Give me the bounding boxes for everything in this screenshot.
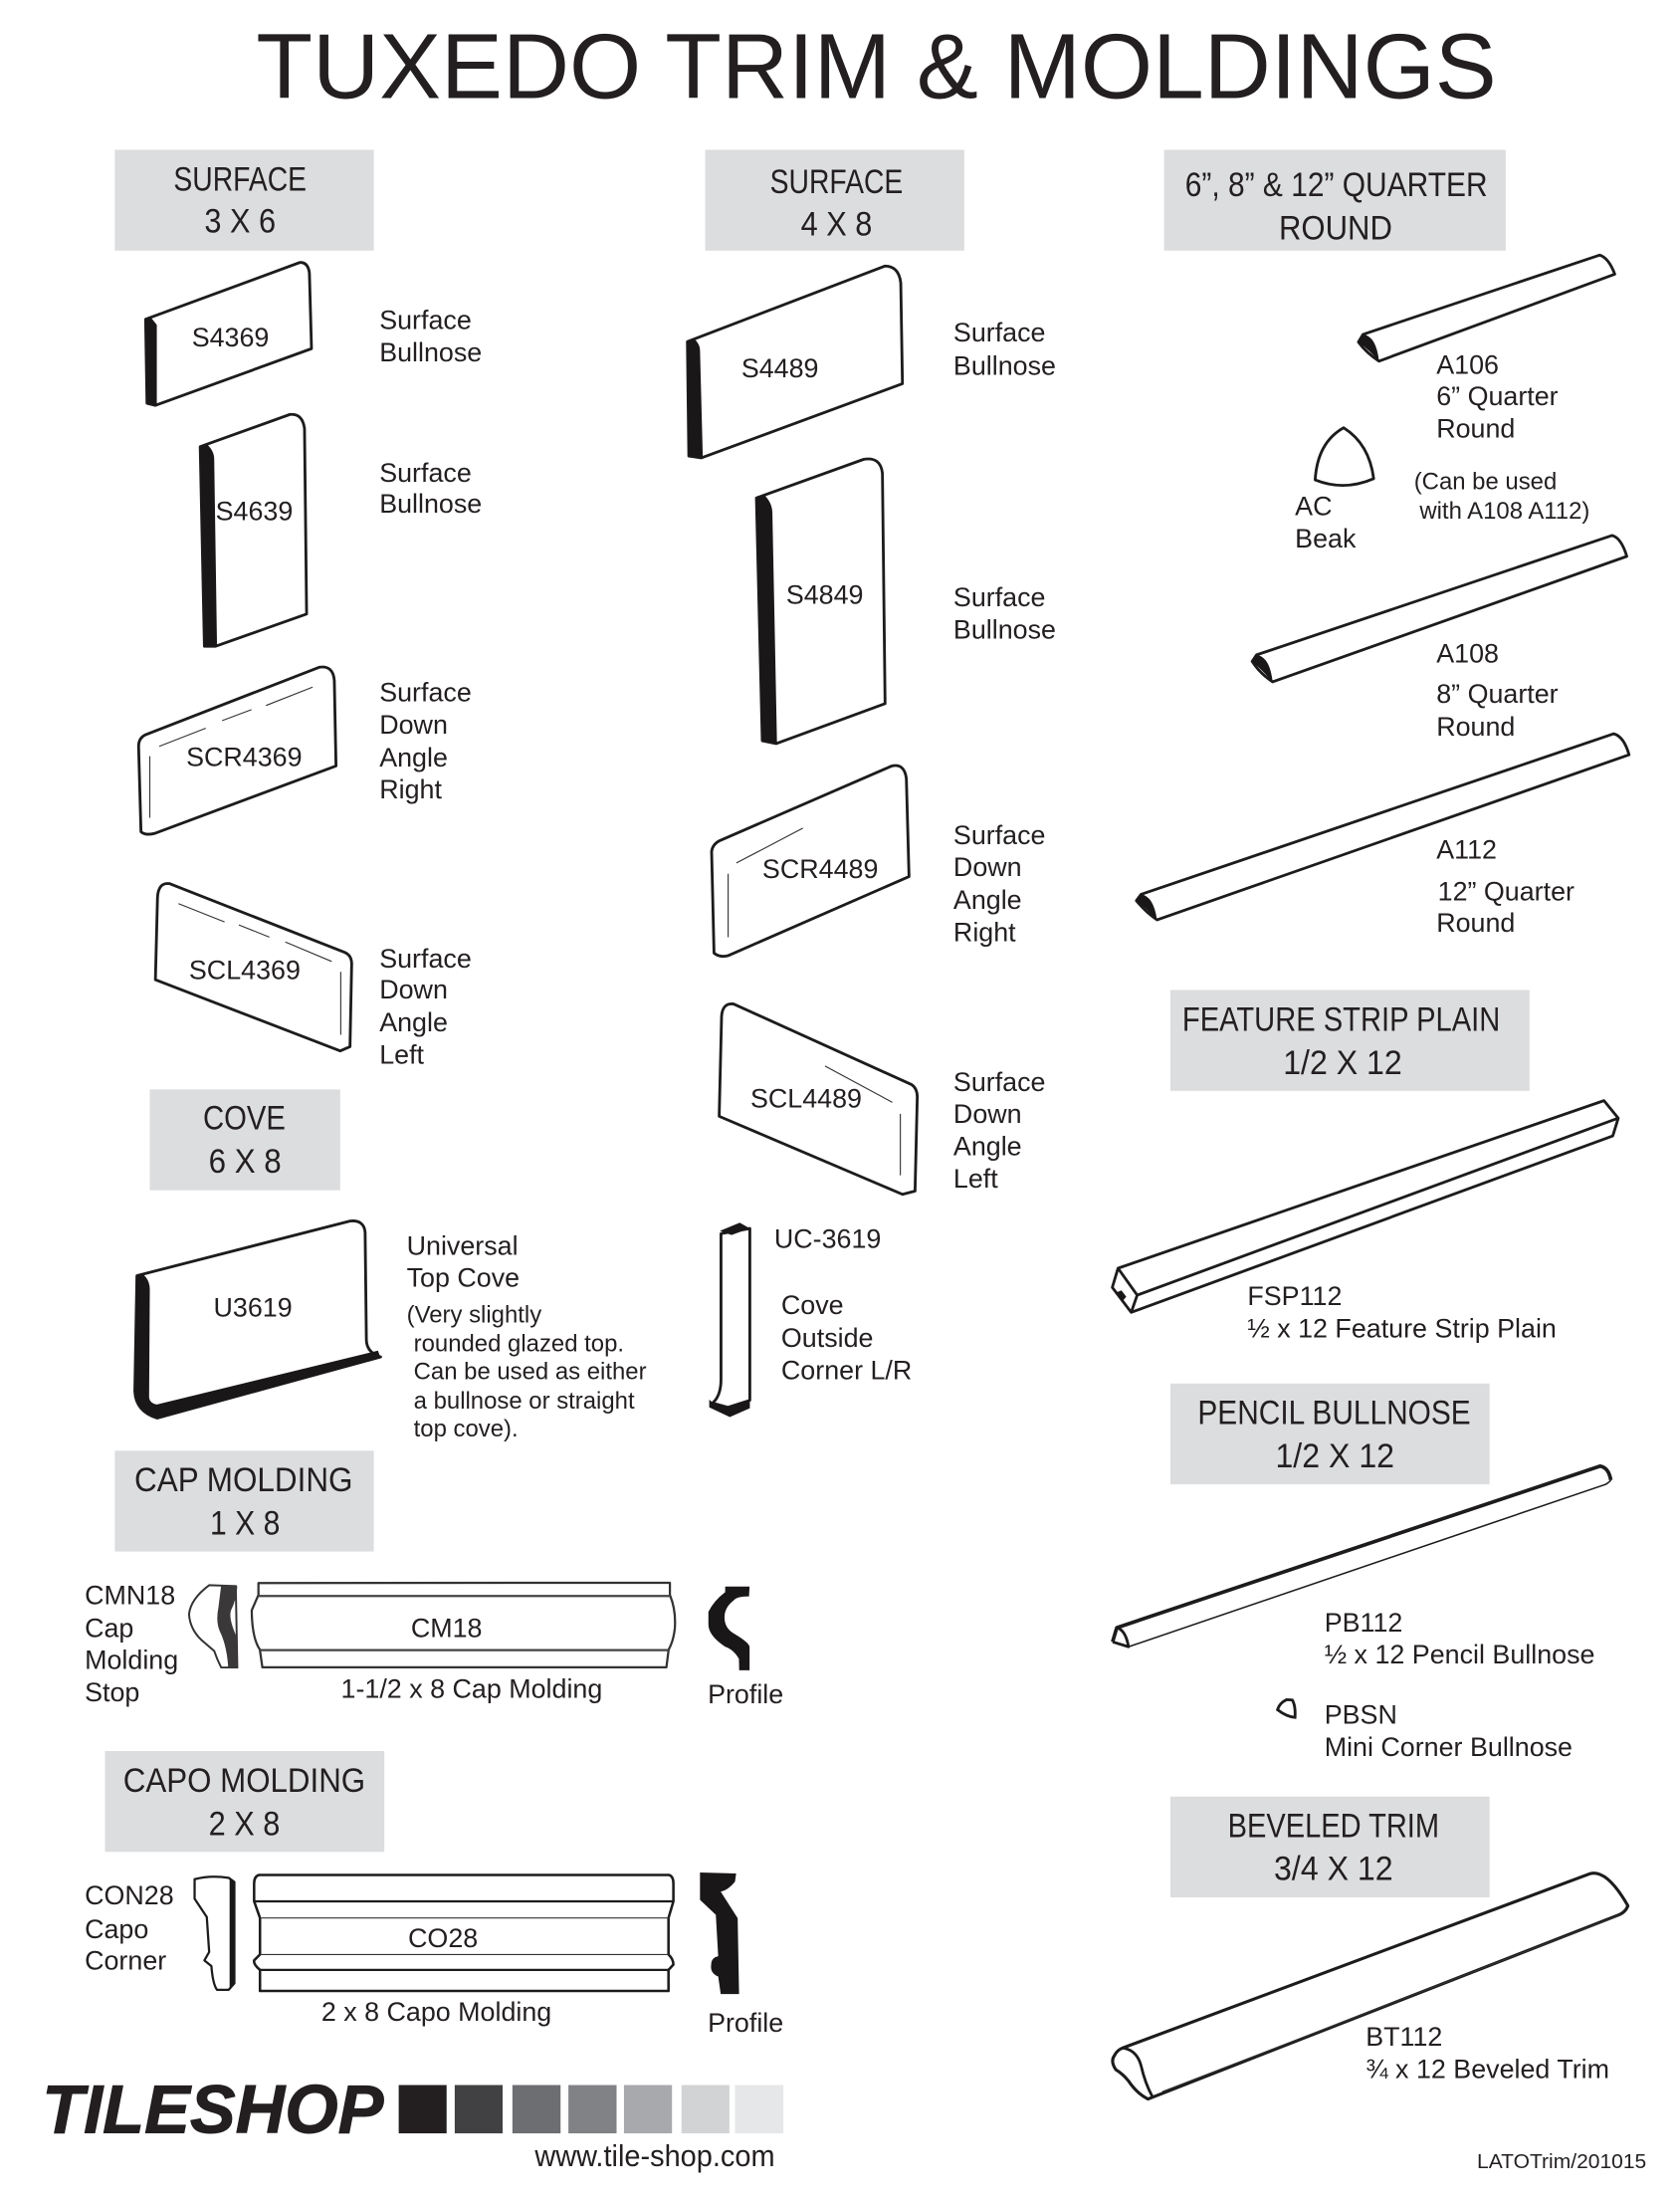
heading: surface 4 x 8: [706, 150, 964, 251]
molding: CM18: CM18: [411, 1613, 483, 1643]
label: U3619 universal top cove: Universal: [407, 1230, 519, 1260]
piece: CON28: [195, 1876, 235, 1990]
tile: S4489: S4489: [741, 353, 819, 383]
tile: S4369: [145, 263, 312, 405]
heading: feature strip plain: 1/2 X 12: [1283, 1044, 1402, 1082]
label: SCL4489 surface down angle left: Down: [953, 1099, 1022, 1129]
molding: A112: [1137, 734, 1629, 920]
label: SCR4489 surface down angle right: Angle: [953, 885, 1022, 915]
heading: feature strip plain: FEATURE STRIP PLAIN: [1182, 1000, 1500, 1038]
panel: beveled trim: [1113, 1797, 1628, 2099]
label: UC-3619: UC-3619: [774, 1223, 881, 1253]
heading: surface 4 x 8: SURFACE: [770, 163, 903, 201]
label: CON28 capo corner: Corner: [85, 1945, 166, 1975]
label: PB112: PB112: [1325, 1608, 1402, 1638]
label: AC beak: Beak: [1295, 524, 1357, 553]
heading: beveled trim: BEVELED TRIM: [1228, 1808, 1439, 1846]
label: cove outside corner: Corner L/R: [781, 1356, 912, 1386]
label: A112: 12” Quarter: [1438, 876, 1575, 906]
note: U3619 description: rounded glazed top.: [414, 1330, 624, 1357]
icon: AC beak: [1315, 428, 1373, 486]
label: SCR4489 surface down angle right: Down: [953, 852, 1022, 882]
heading: beveled trim: 3/4 X 12: [1274, 1850, 1393, 1887]
footer code: LATOTrim/201015: [1477, 2151, 1646, 2173]
label: cap molding size: 1-1/2 x 8 Cap Molding: [341, 1674, 602, 1704]
tile: SCR4369: SCR4369: [186, 742, 303, 771]
heading: quarter round: ROUND: [1279, 210, 1392, 248]
label: S4489 surface bullnose: Surface: [953, 318, 1046, 347]
logo grey swatches: [399, 2086, 783, 2133]
label: CON28 capo corner: CON28: [85, 1880, 174, 1910]
piece: CMN18: [189, 1585, 237, 1667]
tile: SCL4369: [155, 883, 351, 1051]
tile: SCR4489: SCR4489: [762, 854, 878, 884]
label: A106: 6” Quarter: [1436, 381, 1559, 411]
heading: beveled trim: [1170, 1797, 1490, 1897]
label: A108: 8” Quarter: [1436, 679, 1559, 709]
title: TUXEDO TRIM & MOLDINGS: [256, 14, 1497, 117]
heading: surface 3 x 6: 3 X 6: [204, 203, 276, 241]
molding: BT112: [1113, 1873, 1628, 2099]
tile: S4369: S4369: [192, 323, 269, 352]
heading: surface 4 x 8: 4 X 8: [801, 205, 872, 243]
molding: CM18: [252, 1583, 675, 1667]
note: U3619 description: a bullnose or straight: [414, 1388, 635, 1415]
icon: PBSN mini corner: [1278, 1699, 1295, 1717]
website url: www.tile-shop.com: [533, 2138, 775, 2173]
label: cap molding profile: Profile: [708, 1679, 783, 1709]
molding: FSP112: [1113, 1101, 1618, 1312]
note: can be used with: (Can be used: [1414, 469, 1557, 496]
note: U3619 description: Can be used as either: [414, 1359, 647, 1386]
tile: SCL4369: SCL4369: [189, 955, 301, 985]
panel: surface 4 x 8: [688, 150, 1056, 1195]
heading: feature strip plain: [1170, 990, 1530, 1091]
label: A108: A108: [1436, 638, 1499, 668]
label: SCL4369 surface down angle left: Down: [379, 975, 448, 1004]
label: FSP112: FSP112: [1247, 1281, 1342, 1311]
tile: U3619: U3619: [214, 1292, 293, 1322]
label: SCL4369 surface down angle left: Surface: [379, 944, 472, 974]
heading: pencil bullnose: [1170, 1384, 1490, 1484]
label: capo molding profile: Profile: [708, 2008, 783, 2038]
label: SCR4369 surface down angle right: Surface: [379, 678, 472, 708]
label: A106: Round: [1436, 414, 1515, 444]
heading: quarter round: [1164, 150, 1506, 251]
label: FSP112: ½ x 12 Feature Strip Plain: [1247, 1313, 1557, 1343]
heading: capo molding: 2 X 8: [209, 1805, 280, 1843]
tile: S4489: [688, 266, 903, 458]
label: CON28 capo corner: Capo: [85, 1914, 148, 1944]
panel: pencil bullnose: [1113, 1384, 1611, 1762]
label: A108: Round: [1436, 712, 1515, 742]
label: PBSN: PBSN: [1325, 1700, 1397, 1730]
note: U3619 description: (Very slightly: [407, 1302, 541, 1329]
tile: S4639: S4639: [216, 497, 293, 527]
panel: feature strip plain: [1113, 990, 1618, 1343]
label: CMN18 cap molding stop: Cap: [85, 1613, 133, 1643]
heading: capo molding: CAPO MOLDING: [123, 1762, 365, 1800]
label: S4849 surface bullnose: Surface: [953, 582, 1046, 612]
molding: CO28: [254, 1875, 674, 1991]
note: U3619 description: top cove).: [414, 1416, 519, 1442]
heading: pencil bullnose: 1/2 X 12: [1275, 1437, 1394, 1475]
tile: SCL4489: SCL4489: [750, 1084, 862, 1114]
molding: A108: [1252, 536, 1627, 682]
heading: cove: 6 X 8: [209, 1143, 282, 1181]
label: SCL4489 surface down angle left: Surface: [953, 1067, 1046, 1097]
molding: A106: [1359, 255, 1614, 361]
label: PB112: ½ x 12 Pencil Bullnose: [1325, 1640, 1594, 1669]
label: CMN18 cap molding stop: Stop: [85, 1677, 139, 1707]
label: SCR4489 surface down angle right: Surface: [953, 820, 1046, 850]
label: cove outside corner: Outside: [781, 1323, 873, 1353]
heading: capo molding: [105, 1751, 384, 1852]
tile: SCR4369: [138, 667, 336, 834]
heading: cap molding: CAP MOLDING: [134, 1461, 352, 1499]
logo wordmark: TILESHOP: [42, 2071, 384, 2147]
tile: U3619: [134, 1220, 380, 1419]
label: capo molding size: 2 x 8 Capo Molding: [321, 1997, 551, 2027]
label: S4639 surface bullnose: Surface: [379, 458, 472, 488]
label: A112: A112: [1436, 834, 1497, 864]
note: can be used with: with A108 A112): [1418, 498, 1589, 525]
label: BT112: BT112: [1365, 2022, 1442, 2052]
molding: PB112: [1113, 1466, 1611, 1647]
tile: S4639: [200, 414, 307, 646]
panel: surface 3 x 6: [114, 150, 482, 1069]
label: SCL4489 surface down angle left: Left: [953, 1164, 998, 1194]
label: S4369 surface bullnose: Surface: [379, 306, 472, 335]
heading: cove: COVE: [203, 1099, 286, 1137]
label: CMN18 cap molding stop: Molding: [85, 1646, 178, 1675]
panel: quarter round: [1137, 150, 1629, 938]
label: BT112: ¾ x 12 Beveled Trim: [1365, 2054, 1609, 2084]
label: AC beak: AC: [1295, 492, 1332, 522]
label: S4639 surface bullnose: Bullnose: [379, 489, 482, 519]
label: PBSN: Mini Corner Bullnose: [1325, 1732, 1573, 1762]
tile: UC-3619: [710, 1222, 749, 1418]
heading: cap molding: 1 X 8: [210, 1505, 280, 1543]
label: U3619 universal top cove: Top Cove: [407, 1263, 520, 1293]
label: SCL4369 surface down angle left: Angle: [379, 1007, 448, 1037]
tile: SCL4489: [720, 1003, 918, 1195]
label: SCR4489 surface down angle right: Right: [953, 917, 1016, 947]
tile: S4849: S4849: [786, 579, 864, 609]
label: S4369 surface bullnose: Bullnose: [379, 337, 482, 367]
label: SCR4369 surface down angle right: Down: [379, 710, 448, 740]
label: S4849 surface bullnose: Bullnose: [953, 614, 1056, 644]
label: A112: Round: [1436, 908, 1515, 938]
label: CMN18 cap molding stop: CMN18: [85, 1580, 175, 1610]
label: S4489 surface bullnose: Bullnose: [953, 350, 1056, 380]
heading: pencil bullnose: PENCIL BULLNOSE: [1197, 1395, 1471, 1432]
label: cove outside corner: Cove: [781, 1290, 844, 1320]
tile: SCR4489: [712, 766, 909, 957]
icon: capo molding profile: [700, 1872, 739, 1994]
panel: cap molding: [85, 1450, 783, 1709]
label: SCR4369 surface down angle right: Right: [379, 774, 442, 804]
heading: cap molding: [114, 1450, 374, 1552]
heading: quarter round: 6”, 8” & 12” QUARTER: [1185, 166, 1488, 204]
label: A106: A106: [1436, 350, 1499, 380]
icon: cap molding profile: [709, 1587, 749, 1670]
logo: tileshop: [42, 2071, 783, 2173]
label: SCR4369 surface down angle right: Angle: [379, 743, 448, 772]
heading: surface 3 x 6: [114, 150, 374, 251]
tile: S4849: [756, 459, 885, 744]
panel: cove: [134, 1089, 912, 1442]
label: SCL4489 surface down angle left: Angle: [953, 1131, 1022, 1161]
heading: cove: [150, 1089, 340, 1191]
heading: surface 3 x 6: SURFACE: [173, 160, 307, 198]
label: SCL4369 surface down angle left: Left: [379, 1039, 425, 1069]
molding: CO28: CO28: [408, 1923, 478, 1953]
panel: capo molding: [85, 1751, 783, 2038]
